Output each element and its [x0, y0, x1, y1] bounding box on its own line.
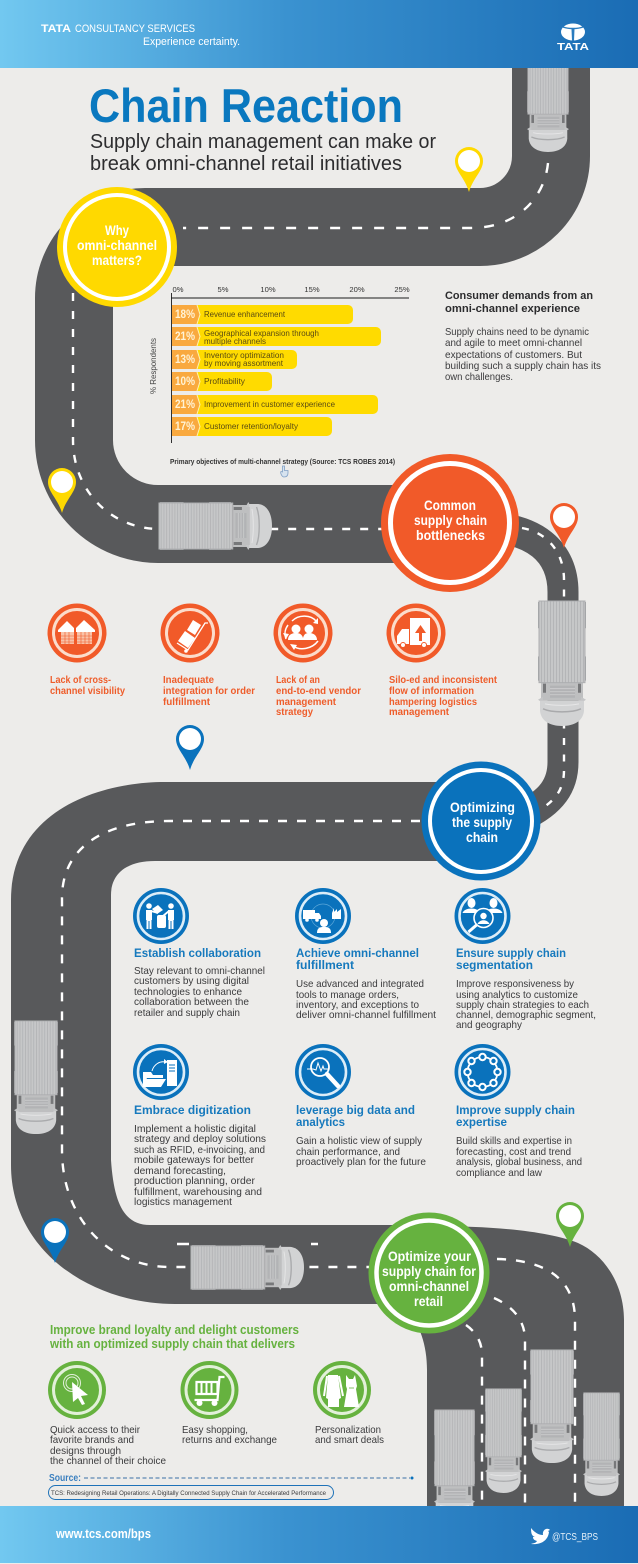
text block: improve supply chain expertise: expertise	[456, 1115, 507, 1129]
text: easy shopping	[182, 1425, 277, 1446]
bar: inventory optimization: Inventory optimization	[204, 350, 284, 360]
text block: ensure supply chain segmentation: Ensure supply chain	[456, 946, 566, 960]
label: lack of vendor strategy	[276, 675, 361, 718]
header logo text: TATA	[41, 23, 71, 35]
label: inadequate integration: fulfillment	[163, 697, 211, 708]
text block: improve supply chain expertise	[456, 1103, 582, 1179]
label: lack of cross-channel visibility: channel visibility	[50, 686, 125, 697]
circle: optimize your supply chain: Optimize your	[388, 1249, 472, 1264]
text block: improve supply chain expertise: compliance and law	[456, 1168, 542, 1179]
text block: embrace digitization: demand forecasting,	[134, 1166, 226, 1177]
circle: optimizing the supply chain: chain	[466, 830, 498, 845]
text: easy shopping: returns and exchange	[182, 1435, 277, 1446]
pin: blue middle	[176, 725, 204, 770]
label: lack of vendor strategy: Lack of an	[276, 675, 320, 686]
bar: geographical expansion: 21%	[175, 331, 195, 343]
text block: ensure supply chain segmentation: supply chain strategies to each	[456, 1000, 589, 1011]
text block: consumer demands: own challenges.	[445, 372, 513, 383]
pin: orange	[550, 503, 578, 548]
source label and leader	[49, 1473, 414, 1484]
circle: optimize your supply chain: retail	[414, 1294, 443, 1309]
header logo text: Experience certainty.	[143, 36, 240, 48]
text: quick access: designs through	[50, 1446, 121, 1457]
bar: profitability: Profitability	[204, 376, 246, 386]
label: lack of vendor strategy: management	[276, 697, 337, 708]
text: personalization: and smart deals	[315, 1435, 384, 1446]
label: lack of vendor strategy: end-to-end vendor	[276, 686, 361, 697]
text: quick access	[50, 1425, 166, 1467]
pin: blue lower	[41, 1218, 69, 1263]
text block: ensure supply chain segmentation: channel, demographic segment,	[456, 1010, 596, 1021]
bar chart: primary objectives	[148, 285, 410, 443]
bar: geographical expansion: multiple channels	[204, 336, 266, 346]
text: quick access: the channel of their choice	[50, 1456, 166, 1467]
text block: improve supply chain expertise: analysis, global business, and	[456, 1157, 582, 1168]
bar: inventory optimization	[172, 350, 297, 369]
chart axis labels: 15%	[304, 285, 320, 294]
truck: right vertical	[538, 601, 586, 726]
text: personalization	[315, 1425, 384, 1446]
icon: tata emblem	[557, 24, 589, 53]
icon: tata emblem: TATA	[557, 42, 589, 53]
text block: improve supply chain expertise: forecasting, cost and trend	[456, 1147, 571, 1158]
truck: second leg horizontal	[159, 502, 272, 550]
circle: why omni-channel matters: Why	[105, 223, 129, 238]
text block: embrace digitization: production planning, order	[134, 1176, 256, 1187]
bar: customer retention: 17%	[175, 421, 195, 433]
truck: left vertical	[14, 1021, 58, 1134]
source citation box	[48, 1486, 334, 1500]
text block: achieve omni-channel fulfillment: Achieve omni-channel	[296, 946, 419, 960]
icon: omni-channel network	[295, 888, 351, 944]
circle: optimizing the supply chain	[422, 762, 540, 880]
header logo text: CONSULTANCY SERVICES	[75, 23, 195, 35]
truck: lane three	[530, 1350, 574, 1463]
icon: big data magnifier	[295, 1044, 351, 1100]
text block: achieve omni-channel fulfillment: Use advanced and integrated	[296, 979, 424, 990]
text block: leverage big data: proactively plan for the future	[296, 1157, 426, 1168]
text: quick access: Quick access to their	[50, 1425, 140, 1436]
icon: shopping cart	[180, 1361, 238, 1419]
bar: geographical expansion	[172, 327, 381, 346]
header band	[0, 0, 638, 68]
bar: revenue enhancement: 18%	[175, 309, 195, 321]
icon: warehouses	[48, 604, 106, 662]
circle: optimizing the supply chain: the supply	[452, 815, 512, 830]
text block: achieve omni-channel fulfillment	[296, 946, 436, 1021]
text block: embrace digitization: strategy and deploy solutions	[134, 1134, 266, 1145]
circle: common supply chain bottlenecks: Common	[424, 498, 476, 513]
chart axis labels: 25%	[394, 285, 410, 294]
road lane dashes	[62, 163, 575, 1506]
label: inadequate integration: integration for order	[163, 686, 255, 697]
text block: ensure supply chain segmentation: and geography	[456, 1020, 523, 1031]
footer band	[0, 1506, 638, 1563]
text block: ensure supply chain segmentation: using analytics to customize	[456, 990, 578, 1001]
circle: optimizing the supply chain: Optimizing	[450, 800, 515, 815]
chart axis labels: 5%	[218, 285, 229, 294]
truck: lane four	[583, 1393, 620, 1496]
chart axis labels	[173, 285, 410, 294]
text block: improve supply chain expertise: Build skills and expertise in	[456, 1136, 572, 1147]
circle: common supply chain bottlenecks: supply chain	[414, 513, 487, 528]
text block: consumer demands	[445, 290, 601, 383]
text block: consumer demands: omni-channel experience	[445, 303, 580, 315]
circle: common supply chain bottlenecks	[381, 454, 519, 592]
icon: twitter bird	[531, 1528, 550, 1544]
label: silo-ed information flow: management	[389, 707, 450, 718]
text block: consumer demands: and agile to meet omni-channel	[445, 338, 582, 349]
heading: improve brand loyalty	[49, 1323, 299, 1351]
text block: establish collaboration: customers by using digital	[134, 976, 249, 987]
text block: consumer demands: building such a supply chain has its	[445, 361, 601, 372]
circle: why omni-channel matters: matters?	[92, 253, 142, 268]
icon: collaboration	[133, 888, 189, 944]
text block: establish collaboration: retailer and supply chain	[134, 1008, 240, 1019]
heading: improve brand loyalty: with an optimized supply chain that delivers	[49, 1337, 295, 1351]
icon: hand cursor	[281, 466, 288, 477]
label: inadequate integration	[163, 675, 255, 708]
label: lack of cross-channel visibility	[50, 675, 125, 697]
text block: leverage big data: analytics	[296, 1115, 345, 1129]
text block: establish collaboration: collaboration between the	[134, 997, 249, 1008]
footer handle: @TCS_BPS	[552, 1532, 598, 1543]
icon: delivery truck with arrow	[386, 604, 446, 662]
icon: dresses	[313, 1361, 371, 1419]
source label and leader: Source:	[49, 1473, 81, 1484]
text block: achieve omni-channel fulfillment: inventory, and exceptions to	[296, 1000, 419, 1011]
bar: customer retention: Customer retention/loyalty	[204, 421, 299, 431]
label: silo-ed information flow: Silo-ed and inconsistent	[389, 675, 498, 686]
label: silo-ed information flow: flow of information	[389, 686, 474, 697]
truck: bottom horizontal	[191, 1245, 304, 1290]
circle: why omni-channel matters: omni-channel	[77, 238, 157, 253]
text block: embrace digitization: Embrace digitization	[134, 1103, 251, 1117]
label: lack of cross-channel visibility: Lack of cross-	[50, 675, 111, 686]
text block: ensure supply chain segmentation: Improve responsiveness by	[456, 979, 575, 990]
pin: green	[556, 1202, 584, 1247]
icon: vendors cycle	[274, 604, 332, 662]
chart axis labels: 20%	[349, 285, 365, 294]
bar: customer experience	[172, 395, 378, 414]
bar: customer experience: Improvement in customer experience	[204, 399, 335, 409]
icon: digitization folder and server	[133, 1044, 189, 1100]
truck: lane two	[485, 1389, 522, 1493]
text block: consumer demands: Supply chains need to be dynamic	[445, 327, 589, 338]
circle: common supply chain bottlenecks: bottlenecks	[416, 528, 485, 543]
text block: achieve omni-channel fulfillment: deliver omni-channel fulfillment	[296, 1010, 436, 1021]
text block: improve supply chain expertise: Improve supply chain	[456, 1103, 575, 1117]
text block: leverage big data: chain performance, and	[296, 1147, 400, 1158]
text block: embrace digitization: fulfillment, warehousing and	[134, 1187, 262, 1198]
icon: segmentation magnifier	[454, 888, 510, 944]
text block: establish collaboration	[134, 946, 265, 1019]
text block: achieve omni-channel fulfillment: fulfillment	[296, 958, 354, 972]
circle: optimize your supply chain	[368, 1212, 490, 1334]
chart caption: Primary objectives of multi-channel strategy (Source: TCS ROBES 2014)	[170, 457, 395, 466]
text block: embrace digitization	[134, 1103, 266, 1208]
text block: embrace digitization: such as RFID, e-invoicing, and	[134, 1145, 265, 1156]
bar: customer experience: 21%	[175, 399, 195, 411]
pin: yellow top	[455, 147, 483, 192]
pin: yellow left	[48, 468, 76, 513]
text block: establish collaboration: technologies to enhance	[134, 987, 242, 998]
label: lack of vendor strategy: strategy	[276, 707, 313, 718]
chart axis labels: 10%	[260, 285, 276, 294]
text block: consumer demands: expectations of customers. But	[445, 350, 582, 361]
label: silo-ed information flow	[389, 675, 498, 718]
text block: achieve omni-channel fulfillment: tools to manage orders,	[296, 990, 399, 1001]
chart axis labels: 0%	[173, 285, 184, 294]
subtitle: break omni-channel retail initiatives	[90, 153, 402, 175]
bar: inventory optimization: 13%	[175, 354, 195, 366]
icon: chain ring	[454, 1044, 510, 1100]
circle: optimize your supply chain: supply chain for	[382, 1264, 477, 1279]
bar: profitability	[172, 372, 272, 391]
text: easy shopping: Easy shopping,	[182, 1425, 248, 1436]
bar: profitability: 10%	[175, 376, 195, 388]
circle: why omni-channel matters	[57, 187, 177, 307]
bar: geographical expansion: Geographical expansion through	[204, 328, 319, 338]
footer url: www.tcs.com/bps	[55, 1526, 151, 1541]
text block: embrace digitization: Implement a holistic digital	[134, 1124, 256, 1135]
text block: establish collaboration: Stay relevant to omni-channel	[134, 966, 265, 977]
text block: leverage big data: leverage big data and	[296, 1103, 415, 1117]
text block: establish collaboration: Establish collaboration	[134, 946, 261, 960]
title: Chain Reaction	[89, 79, 403, 132]
subtitle: Supply chain management can make or	[90, 131, 436, 153]
truck: top right	[527, 43, 569, 152]
text block: ensure supply chain segmentation: segmentation	[456, 958, 533, 972]
text block: embrace digitization: mobile gateways for better	[134, 1155, 255, 1166]
text block: consumer demands: Consumer demands from an	[445, 290, 593, 302]
bar: revenue enhancement: Revenue enhancement	[204, 309, 286, 319]
label: inadequate integration: Inadequate	[163, 675, 214, 686]
text: quick access: favorite brands and	[50, 1435, 134, 1446]
text block: ensure supply chain segmentation	[456, 946, 596, 1031]
icon: hand truck	[160, 604, 220, 662]
bar: revenue enhancement	[172, 305, 353, 324]
heading: improve brand loyalty: Improve brand loyalty and delight customers	[50, 1323, 299, 1337]
truck: lane one	[434, 1410, 475, 1526]
subtitle	[90, 131, 436, 175]
label: silo-ed information flow: hampering logistics	[389, 697, 477, 708]
icon: click cursor	[48, 1361, 106, 1419]
text block: leverage big data: Gain a holistic view of supply	[296, 1136, 423, 1147]
bar: inventory optimization: by moving assortment	[204, 358, 284, 368]
text: personalization: Personalization	[315, 1425, 381, 1436]
text block: embrace digitization: logistics management	[134, 1197, 232, 1208]
text block: leverage big data	[296, 1103, 426, 1168]
header logo text	[41, 23, 240, 48]
bar: customer retention	[172, 417, 332, 436]
source citation box: TCS: Redesigning Retail Operations: A Digitally Connected Supply Chain for Accelerated Performance	[51, 1490, 326, 1497]
circle: optimize your supply chain: omni-channel	[389, 1279, 469, 1294]
y axis title: % Respondents	[148, 338, 158, 394]
